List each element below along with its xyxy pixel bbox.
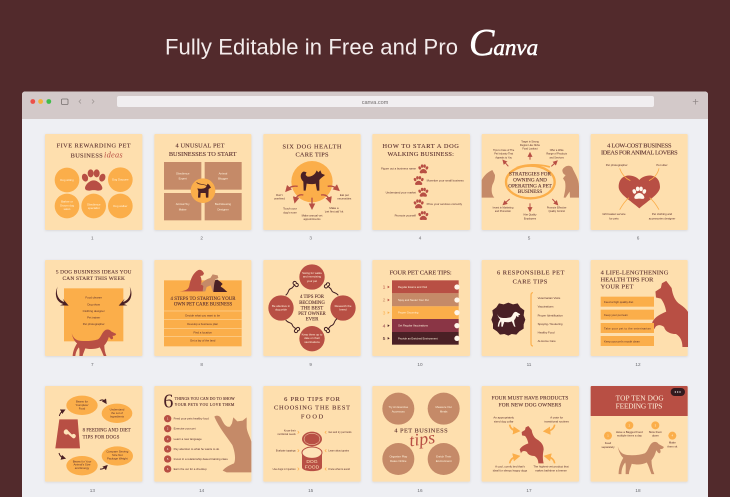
card 5: OPERATING A PET — [508, 183, 553, 189]
card 18: them sit — [667, 444, 677, 448]
card 13: Ingredients — [110, 414, 125, 418]
card 12 — [591, 260, 691, 367]
card 11: Proper Identification — [538, 313, 563, 317]
card 9: date on their — [304, 336, 320, 340]
card 5 — [482, 134, 579, 241]
card 16: Organize Play — [389, 455, 408, 459]
card 8: Get a lay of the land — [190, 339, 216, 343]
card 10: 1 — [383, 285, 386, 291]
card 6: IDEAS FOR ANIMAL LOVERS — [601, 149, 678, 156]
card 7: Food cleaner — [85, 295, 102, 299]
card 3: 'pet first aid' kit — [325, 210, 343, 214]
card 7 — [45, 260, 142, 367]
card 12: YOUR PET — [601, 284, 633, 291]
card 13: Beans for Your — [73, 459, 91, 463]
card 5: Quality Control — [548, 210, 565, 213]
card 2: 4 UNUSUAL PET — [175, 143, 225, 150]
card 14: 6 — [167, 467, 169, 471]
card 8 — [154, 260, 251, 367]
card 15: Evaluate toppings — [276, 450, 296, 453]
card 13: Package Weight — [107, 456, 128, 460]
card 1: Dog sitting — [60, 178, 74, 182]
card 1: 1 — [91, 236, 94, 241]
card 9: THE BEST — [301, 307, 323, 312]
card 14: 2 — [167, 427, 169, 431]
card 2: Bed/Housing — [215, 202, 232, 206]
card 18 — [591, 386, 688, 493]
card 3: appointments — [304, 217, 321, 221]
card 17: An appropriately — [493, 416, 515, 420]
card 18: 18 — [635, 488, 641, 493]
card 9: Research the — [335, 304, 352, 308]
browser window — [22, 92, 708, 497]
card 10: Proper Grooming — [398, 311, 419, 315]
card 18: multiple times a day — [617, 434, 642, 438]
card 10: 10 — [417, 362, 423, 367]
browser toolbar: canva.com — [362, 100, 389, 106]
card 8: Develop a business plan — [187, 322, 218, 326]
card 14: Earn the vet for a checkup — [174, 467, 207, 471]
card 11: Healthy Food — [538, 331, 555, 335]
card 13: 'Complete' — [75, 403, 89, 407]
card 9: BECOMING — [299, 301, 325, 306]
card 2: Animal — [219, 171, 228, 175]
card 1: Dog Daycare — [112, 178, 129, 182]
card 18: 2 — [629, 423, 631, 427]
card 17: FOR NEW DOG OWNERS — [499, 403, 561, 409]
card 3: SIX DOG HEALTH — [282, 143, 342, 150]
card 3: necessities — [337, 197, 352, 201]
card 10 — [372, 260, 470, 367]
card 12: HEALTH TIPS FOR — [601, 276, 654, 283]
card 6: for pets — [609, 217, 619, 221]
card 14: 4 — [167, 447, 169, 451]
card 5: Range of Products — [546, 153, 568, 156]
card 5: Food Lookout — [522, 148, 538, 151]
card 14: 14 — [199, 488, 205, 493]
card 13: TIPS FOR DOGS — [83, 435, 120, 440]
card 14: 3 — [167, 437, 169, 441]
card 5: 5 — [528, 236, 531, 241]
card 14: Feed your pets healthy food — [174, 417, 209, 421]
card 2: Maker — [179, 207, 187, 211]
card 13: Understand — [110, 408, 125, 412]
card 18: 1 — [607, 434, 609, 438]
card 15: FOOD — [301, 414, 324, 421]
card 13: Animal's Size — [74, 463, 91, 467]
card 12: Keep your pet lean — [604, 313, 628, 317]
card 18: Make — [669, 440, 676, 444]
card 13: Beans for — [76, 400, 88, 404]
card 5: BUSINESS — [518, 189, 542, 195]
card 2: Designer — [217, 207, 229, 211]
card 3: dog's nose — [283, 210, 297, 214]
card 18: 3 — [655, 423, 657, 427]
card 7: Pet photographer — [83, 322, 105, 326]
card 11: Veterinarian Visits — [538, 296, 561, 300]
card 16: 16 — [417, 488, 423, 493]
card 4: 4 — [419, 236, 422, 241]
card 7: 5 DOG BUSINESS IDEAS YOU — [56, 269, 132, 275]
card 17: transitional routines — [544, 420, 570, 424]
card 11: CARE TIPS — [513, 278, 548, 285]
card 18: Slow them — [649, 430, 663, 434]
card 17: The highest-vet product that — [533, 465, 569, 469]
card 3: Make a — [329, 206, 339, 210]
card 1: salon — [64, 207, 71, 211]
card 7: CAN START THIS WEEK — [62, 276, 125, 282]
card 14: Exercise your pet — [174, 427, 196, 431]
card 1: BUSINESS — [71, 153, 103, 160]
card 4: WALKING BUSINESS: — [387, 151, 454, 158]
card 1: Groom dog — [60, 203, 74, 207]
card 9: Swing for walks — [302, 271, 322, 275]
card 14: YOUR PETS YOU LOVE THEM — [175, 403, 235, 407]
card 15 — [263, 386, 361, 493]
card 10: 2 — [383, 298, 386, 304]
card 18: down — [652, 434, 659, 438]
card 9: Keep them up to — [302, 332, 323, 336]
card 1 — [45, 134, 142, 241]
card 1: Barber or — [61, 200, 73, 204]
card 11: 11 — [527, 362, 532, 367]
card 17: sized dog collar — [494, 420, 514, 424]
card 1: Dog walker — [113, 204, 127, 208]
card 3: 3 — [309, 236, 312, 241]
browser toolbar — [22, 92, 708, 119]
card 2: Expert — [179, 177, 187, 181]
card 11: At-Home Care — [538, 339, 556, 343]
card 10: 5 — [383, 336, 386, 342]
card 9: your pet — [307, 279, 317, 283]
card 3: CARE TIPS — [295, 152, 329, 159]
card 6: 6 — [637, 236, 640, 241]
card 17: makes bathtime a breeze — [535, 469, 567, 473]
card 2: BUSINESSES TO START — [169, 151, 237, 158]
card 11: Vaccinations — [538, 304, 554, 308]
card 5: OWNING AND — [513, 178, 547, 184]
card 3: Make annual vet — [302, 213, 323, 217]
card 16 — [372, 386, 470, 493]
card 7: 7 — [91, 362, 94, 367]
card 13: 13 — [90, 488, 95, 493]
card 8: Decide what you want to be — [185, 313, 220, 317]
card 14: Pay attention to what he wants to do — [174, 447, 220, 451]
card 12: 4 LIFE-LENGTHENING — [601, 269, 669, 276]
card 4: HOW TO START A DOG — [382, 143, 459, 150]
card 12: Keep your pet's mouth clean — [604, 339, 640, 343]
template grid — [45, 134, 691, 493]
card 2 — [154, 134, 251, 241]
card 8: 8 — [200, 362, 203, 367]
card 5: Hire Quality — [524, 214, 537, 217]
card 9: dog pride — [275, 308, 287, 312]
card 15: CHOOSING THE BEST — [274, 405, 350, 412]
card 15: nutritional needs — [277, 433, 296, 436]
card 18: Feed — [605, 441, 612, 445]
card 10: Spay and Neuter Your Pet — [398, 298, 429, 302]
card 9: PET OWNER — [298, 312, 326, 317]
card 9: EVER — [306, 318, 319, 323]
title: Fully Editable in Free and Pro — [165, 34, 458, 60]
card 10: Get Regular Vaccinations — [398, 324, 429, 328]
card 9: breed — [339, 308, 347, 312]
card 4: Figure out a business name — [381, 167, 416, 171]
card 8: 4 STEPS TO STARTING YOUR — [170, 297, 236, 302]
card 9: 4 TIPS FOR — [300, 295, 325, 300]
card 15: 15 — [308, 488, 314, 493]
card 2: Blogger — [218, 177, 228, 181]
card 3 — [263, 134, 361, 241]
card 14: THINGS YOU CAN DO TO SHOW — [175, 397, 235, 401]
card 13 — [45, 386, 142, 493]
card 17: 17 — [526, 488, 532, 493]
card 17: A cool, comfy bed that's — [495, 465, 525, 469]
card 16: Measure Out — [435, 405, 452, 409]
card 3: overfeed — [274, 197, 285, 201]
card 17 — [482, 386, 579, 493]
card 3: Touch your — [283, 207, 297, 211]
card 2: 2 — [200, 236, 203, 241]
card 5: Invest in Marketing — [493, 206, 514, 209]
card 4: Monetize your small business — [427, 179, 464, 183]
address bar — [117, 96, 654, 107]
card 9 — [263, 260, 361, 367]
card 5: Tips to Care of The — [493, 149, 515, 152]
card 14 — [154, 386, 251, 493]
card 4: Promote yourself — [395, 213, 416, 217]
card 8: Find a location — [193, 330, 212, 334]
card 5: Target in Strong — [521, 141, 539, 144]
card 3: Don't — [276, 193, 283, 197]
card 14: Learn a new language — [174, 437, 202, 441]
card 1: specialist — [88, 206, 100, 210]
card 18: TOP TEN DOG — [616, 394, 664, 403]
card 15: 6 PRO TIPS FOR — [284, 396, 341, 403]
card 10: 3 — [383, 310, 386, 316]
card 5: Offer a Wide — [550, 149, 564, 152]
card 13: 8 FEEDING AND DIET — [83, 429, 131, 434]
card 13: Compare Serving — [106, 450, 129, 454]
card 7: Pet trainer — [87, 315, 100, 319]
card 5: Region Like Niche — [520, 144, 541, 147]
card 18: Have a Bagged Food — [616, 430, 643, 434]
card 11: 6 RESPONSIBLE PET — [497, 270, 564, 277]
card 16: tips — [408, 428, 437, 450]
card 16: Accessory — [392, 409, 405, 413]
card 18: separately — [601, 445, 615, 449]
card 18: 4 — [672, 434, 674, 438]
card 16: Enrich Their — [436, 455, 451, 459]
card 15: Learn about grains — [328, 450, 350, 453]
card 16: Meals — [440, 409, 448, 413]
card 5: STRATEGIES FOR — [509, 172, 552, 178]
card 10: FOUR PET CARE TIPS: — [390, 269, 452, 276]
canva wordmark: Canva — [469, 22, 538, 64]
card 1: FIVE REWARDING PET — [57, 143, 131, 150]
card 16: 4 PET BUSINESS — [394, 428, 448, 435]
card 12: 12 — [635, 362, 641, 367]
card 4: Price your services correctly — [427, 202, 463, 206]
card 2: Animal Toy — [176, 202, 190, 206]
card 7: Clothing designer — [83, 309, 105, 313]
card 15: FOOD — [305, 464, 320, 470]
card 6: Pet photographer — [606, 163, 628, 167]
card 5: and Services — [549, 156, 565, 159]
card 12: Take your pet to the veterinarian — [604, 326, 651, 330]
card 14: 1 — [167, 417, 169, 421]
card 17: A crate for — [550, 416, 563, 420]
card 9: vaccinations — [304, 340, 320, 344]
card 10: Regular Exams and Visit — [398, 285, 427, 289]
card 6: 4 LOW-COST BUSINESS — [607, 143, 672, 150]
card 6: Gift basket service — [602, 212, 626, 216]
card 16: Dates Online — [390, 459, 407, 463]
card 2: Obedience — [176, 171, 190, 175]
card 4: Understand your market — [386, 190, 416, 194]
card 11: Spaying / Neutering — [538, 322, 563, 326]
card 5: Appeals to You — [495, 156, 513, 159]
card 15: Know what to avoid — [328, 468, 350, 471]
card 15: DOG — [306, 459, 318, 465]
card 12: Feed a high quality diet — [604, 300, 633, 304]
card 9: and exercising — [303, 275, 322, 279]
card 9: Be attentive in — [272, 304, 290, 308]
card 6: accessories designer — [649, 216, 675, 220]
card 5: Pet Industry That — [494, 153, 513, 156]
card 17: FOUR MUST HAVE PRODUCTS — [492, 395, 568, 401]
card 11 — [482, 260, 579, 367]
card 15: Use dogs in Injuction — [273, 468, 296, 471]
card 13: the Lot of — [111, 411, 123, 415]
card 3: Eat pet — [340, 193, 349, 197]
card 13: Food — [79, 406, 86, 410]
card 9: 9 — [309, 362, 312, 367]
card 10: 4 — [383, 323, 386, 329]
card 6: Pet sitter — [656, 163, 668, 167]
card 17: ideal for sleepy happy dogs — [493, 469, 528, 473]
card 7: Dog show — [87, 302, 101, 306]
card 16: Try An Exercise — [388, 405, 409, 409]
card 6: Pet clothing and — [652, 212, 673, 216]
card 14: Invest in a relationship-based training class — [174, 457, 228, 461]
card 6 — [591, 134, 688, 241]
card 5: Employees — [524, 218, 537, 221]
card 10: Provide an Enriched Environment — [398, 336, 438, 340]
card 14: 6 — [163, 390, 173, 412]
card 16: Environment — [436, 459, 452, 463]
card 1: ideas — [104, 151, 123, 160]
card 8: OWN PET CARE BUSINESS — [174, 303, 232, 308]
card 18: FEEDING TIPS — [616, 402, 662, 411]
card 15: Know their — [284, 430, 296, 433]
card 13: and Energy — [75, 466, 90, 470]
card 14: 5 — [167, 457, 169, 461]
card 15: Get and try pet foods — [328, 431, 352, 434]
title — [165, 22, 538, 64]
card 5: Promote Effective — [547, 206, 567, 209]
card 1: Obedience — [87, 202, 101, 206]
card 5: and Promotion — [495, 210, 512, 213]
browser page area — [22, 92, 708, 497]
card 4 — [372, 134, 470, 241]
card 13: Size Not — [112, 453, 123, 457]
